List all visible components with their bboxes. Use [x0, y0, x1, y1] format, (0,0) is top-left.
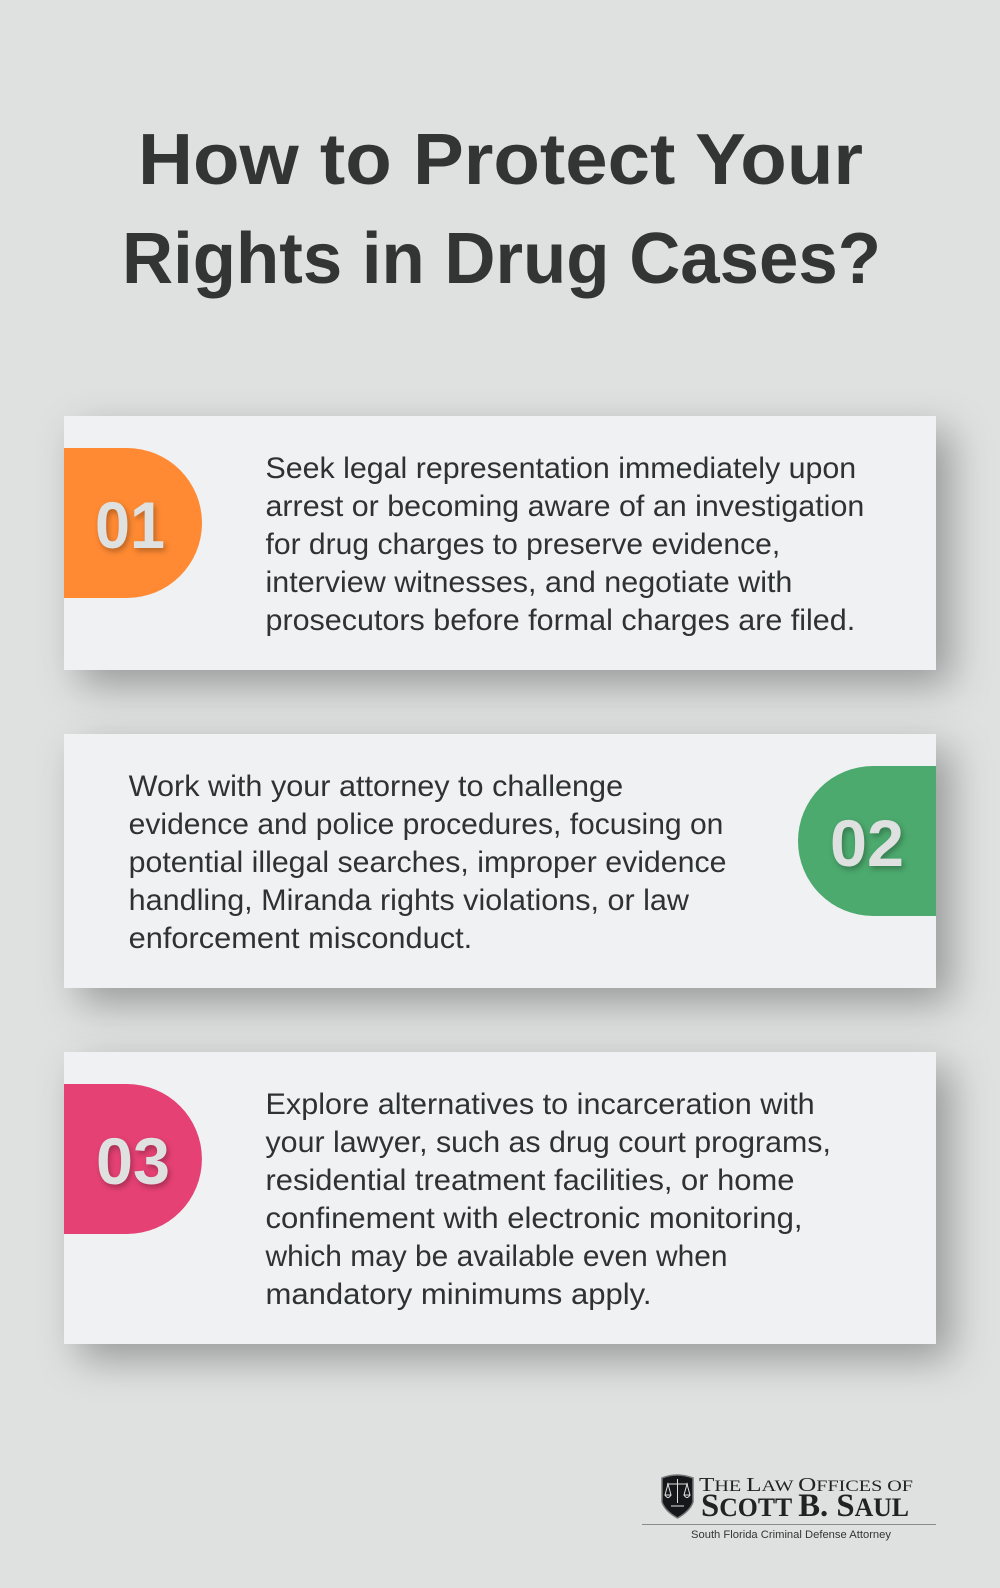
text: step 03 description: mandatory minimums apply.	[266, 1278, 652, 1311]
logo: The Law Offices of Scott B. Saul	[642, 1474, 936, 1541]
card background 03	[64, 1052, 936, 1344]
panel: step 01	[64, 416, 936, 670]
text: step 01 description: prosecutors before formal charges are filed.	[266, 604, 855, 637]
card background 01	[64, 416, 936, 670]
text: step 01 description: arrest or becoming aware of an investigation	[266, 490, 864, 523]
badge 01	[64, 448, 202, 598]
text: step 01 description: Seek legal representation immediately upon	[266, 452, 856, 485]
panel: step 02	[64, 734, 936, 988]
text: step 02 description: evidence and police procedures, focusing on	[129, 808, 723, 841]
logo text: firm name: THE LAW OFFICES OF	[699, 1474, 913, 1496]
text: step 03 description: confinement with electronic monitoring,	[266, 1202, 802, 1235]
badge 02	[798, 766, 936, 916]
text: step 02 description	[129, 770, 726, 955]
text: step 02 description: potential illegal searches, improper evidence	[129, 846, 726, 879]
text: step 03 description: your lawyer, such as drug court programs,	[266, 1126, 831, 1159]
title	[122, 120, 881, 299]
text: step 02 description: handling, Miranda rights violations, or law	[129, 884, 689, 917]
text: step 01 description: interview witnesses, and negotiate with	[266, 566, 792, 599]
badge 03: 03	[96, 1124, 170, 1198]
logo text: tagline: South Florida Criminal Defense Attorney	[691, 1529, 892, 1541]
logo text: attorney name: SCOTT B. SAUL	[701, 1488, 909, 1524]
panel: step 03	[64, 1052, 936, 1344]
badge 03	[64, 1084, 202, 1234]
text: step 03 description: residential treatment facilities, or home	[266, 1164, 794, 1197]
text: step 01 description	[266, 452, 864, 637]
badge 01: 01	[95, 488, 165, 562]
title: Rights in Drug Cases?	[122, 219, 881, 299]
card background 02	[64, 734, 936, 988]
badge 02: 02	[830, 806, 904, 880]
text: step 02 description: enforcement misconduct.	[129, 922, 472, 955]
text: step 03 description	[265, 1088, 831, 1311]
divider	[642, 1524, 936, 1525]
text: step 03 description: Explore alternatives to incarceration with	[266, 1088, 815, 1121]
title: How to Protect Your	[138, 120, 863, 200]
text: step 02 description: Work with your attorney to challenge	[129, 770, 623, 803]
icon: shield with scales	[662, 1475, 693, 1518]
text: step 03 description: which may be available even when	[265, 1240, 728, 1273]
text: step 01 description: for drug charges to preserve evidence,	[266, 528, 780, 561]
